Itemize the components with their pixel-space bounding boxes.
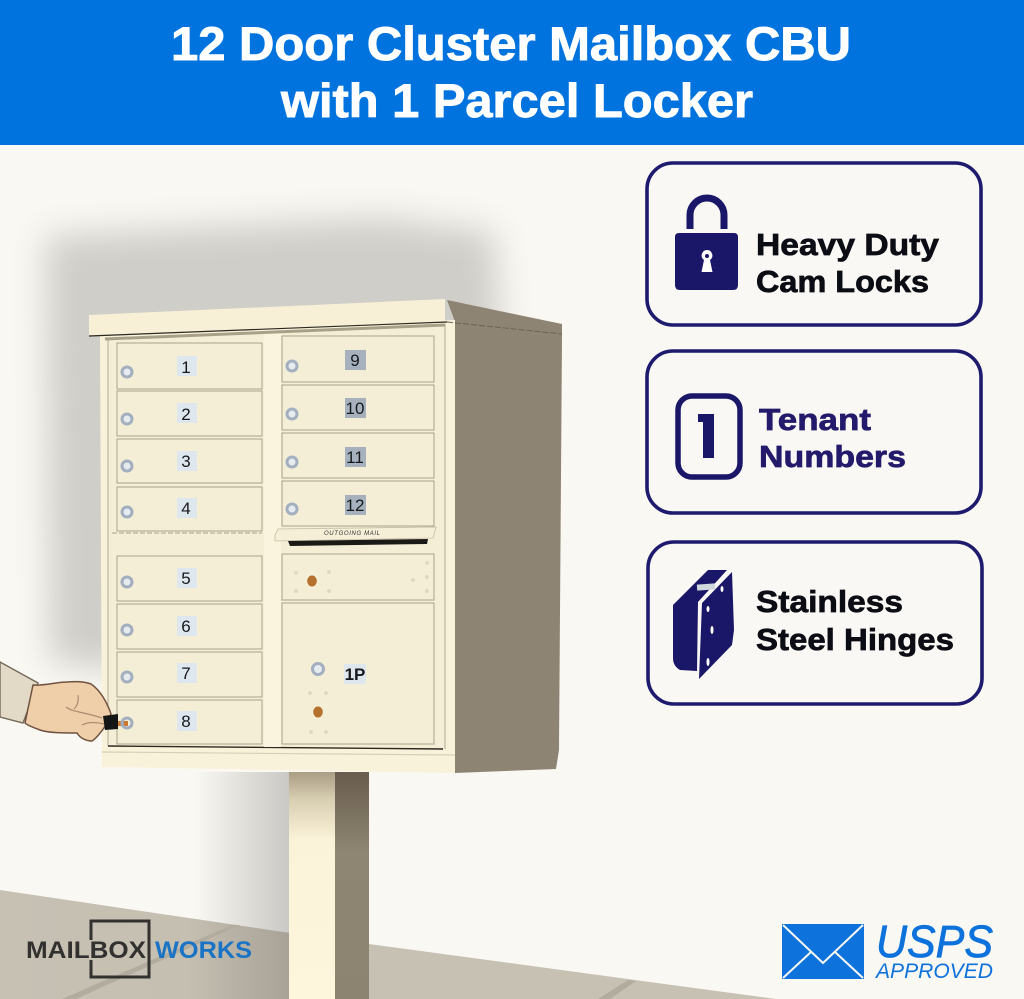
logo: Mailbox Works: WORKS <box>155 937 252 964</box>
door number labels: 5 <box>181 569 191 588</box>
left column doors <box>117 343 262 744</box>
brass locks <box>307 576 323 718</box>
label line 2: Numbers <box>759 439 906 474</box>
door number labels: 8 <box>181 712 191 731</box>
title line 2: with 1 Parcel Locker <box>280 74 753 127</box>
door number labels: 11 <box>346 448 364 467</box>
hand <box>25 682 111 741</box>
mounting post <box>289 772 369 999</box>
door frame <box>108 324 445 749</box>
badge: USPS approved: USPS <box>876 916 993 967</box>
wall shadow behind mailbox <box>46 218 500 937</box>
label line 1: Tenant <box>759 402 871 437</box>
cabinet lid <box>89 299 445 336</box>
door number labels: 12 <box>346 496 364 515</box>
outgoing mail slot: OUTGOING MAIL <box>324 531 380 537</box>
label line 2: Steel Hinges <box>756 622 954 657</box>
lock 8 <box>122 718 132 728</box>
icon: hinge <box>673 570 734 679</box>
title line 1: 12 Door Cluster Mailbox CBU <box>171 17 851 70</box>
icon: envelope <box>782 924 864 979</box>
door number labels: 2 <box>181 405 191 424</box>
door number labels: 4 <box>181 499 191 518</box>
label line 2: Cam Locks <box>756 264 929 299</box>
door number labels: 7 <box>181 664 191 683</box>
door number labels: 6 <box>181 617 191 636</box>
door number labels: 10 <box>346 399 364 418</box>
floor <box>0 890 776 999</box>
label line 1: Stainless <box>756 584 903 619</box>
icon: number one <box>678 396 740 477</box>
panel: stainless steel hinges <box>648 542 982 704</box>
panel: heavy duty cam locks <box>647 163 981 325</box>
rivets <box>294 561 429 734</box>
badge: USPS approved <box>782 916 993 983</box>
key head <box>103 714 118 730</box>
cabinet side <box>447 300 562 773</box>
label line 1: Heavy Duty <box>756 227 940 262</box>
door number labels: 1P <box>345 665 365 684</box>
cabinet front <box>100 320 455 773</box>
door number labels <box>177 350 366 731</box>
hand turning key <box>0 662 132 741</box>
key blade <box>118 721 128 726</box>
outgoing mail slot <box>275 527 436 546</box>
cam locks <box>122 361 324 682</box>
badge: USPS approved: APPROVED <box>874 960 993 983</box>
door number labels: 1 <box>181 358 191 377</box>
door number labels: 9 <box>350 351 360 370</box>
logo: Mailbox Works: MAILBOX <box>26 937 146 964</box>
door number labels: 3 <box>181 452 191 471</box>
sleeve <box>0 662 38 723</box>
mailbox cabinet <box>89 299 562 773</box>
right column doors <box>282 336 434 744</box>
title banner <box>0 0 1024 145</box>
panel: tenant numbers <box>647 351 981 513</box>
logo: Mailbox Works <box>26 921 252 977</box>
icon: padlock <box>675 198 738 290</box>
